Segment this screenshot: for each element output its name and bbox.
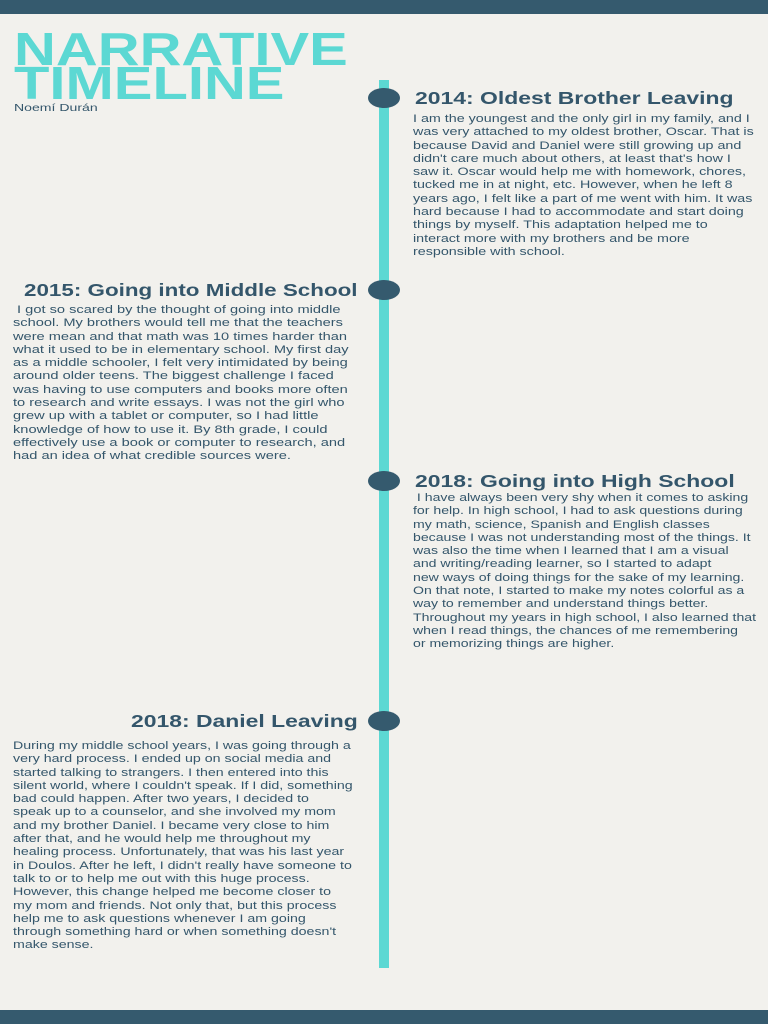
text 2018 Daniel: speak up to a counselor, and she involved my mom	[13, 806, 336, 818]
text 2018 Daniel: talk to or to help me out with this huge process.	[13, 873, 310, 885]
text 2018 Daniel: through something hard or when something doesn't	[13, 926, 336, 938]
text 2018 Daniel: very hard process. I ended up on social media and	[13, 753, 331, 765]
text 2015: effectively use a book or computer to research, and	[13, 437, 345, 449]
text 2014: because David and Daniel were still growing up and	[413, 140, 741, 152]
text 2018 high school: because I was not understanding most of the things. It	[413, 532, 751, 544]
text 2014: was very attached to my oldest brother, Oscar. That is	[413, 126, 754, 138]
text 2014: years ago, I felt like a part of me went with him. It was	[413, 193, 752, 205]
text 2015: I got so scared by the thought of going into middle	[17, 304, 341, 316]
text 2015: school. My brothers would tell me that the teachers	[13, 317, 343, 329]
text 2018 Daniel: silent world, where I couldn't speak. If I did, something	[13, 780, 353, 792]
text 2015: grew up with a tablet or computer, so I had little	[13, 410, 319, 422]
text 2018 Daniel: During my middle school years, I was going through a	[13, 740, 351, 752]
marker 2018 high school	[368, 471, 400, 491]
heading 2015: 2015: Going into Middle School	[24, 280, 358, 300]
text 2018 high school: On that note, I started to make my notes colorful as a	[413, 585, 744, 597]
text 2018 high school: way to remember and understand things better.	[413, 598, 708, 610]
text 2018 Daniel: bad could happen. After two years, I decided to	[13, 793, 309, 805]
top bar	[0, 0, 768, 14]
text 2018 high school: new ways of doing things for the sake of my learning.	[413, 572, 744, 584]
marker 2018 Daniel	[368, 711, 400, 731]
text 2015: knowledge of how to use it. By 8th grade, I could	[13, 424, 328, 436]
text 2015: around older teens. The biggest challenge I faced	[13, 370, 334, 382]
text 2015: were mean and that math was 10 times harder than	[13, 331, 347, 343]
text 2014: interact more with my brothers and be more	[413, 233, 690, 245]
text 2018 high school: I have always been very shy when it comes to asking	[417, 492, 748, 504]
text 2014: saw it. Oscar would help me with homework, chores,	[413, 166, 746, 178]
heading 2018 high school: 2018: Going into High School	[415, 471, 735, 491]
text 2018 Daniel: help me to ask questions whenever I am going	[13, 913, 306, 925]
text 2018 Daniel: healing process. Unfortunately, that was his last year	[13, 846, 344, 858]
title	[14, 23, 348, 109]
text 2014	[413, 113, 754, 258]
title: TIMELINE	[14, 57, 284, 109]
timeline line	[379, 80, 389, 968]
text 2014: responsible with school.	[413, 246, 565, 258]
text 2018 Daniel: after that, and he would help me throughout my	[13, 833, 311, 845]
author: Noemí Durán	[14, 102, 98, 114]
text 2015: was having to use computers and books more often	[13, 384, 348, 396]
text 2018 Daniel: However, this change helped me become closer to	[13, 886, 331, 898]
text 2018 high school: or memorizing things are higher.	[413, 638, 614, 650]
marker 2014	[368, 88, 400, 108]
text 2018 Daniel	[13, 740, 353, 951]
heading 2014: 2014: Oldest Brother Leaving	[415, 88, 734, 108]
text 2018 Daniel: and my brother Daniel. I became very close to him	[13, 820, 329, 832]
text 2014: tucked me in at night, etc. However, when he left 8	[413, 179, 733, 191]
text 2018 high school: Throughout my years in high school, I also learned that	[413, 612, 756, 624]
text 2018 Daniel: in Doulos. After he left, I didn't really have someone to	[13, 860, 352, 872]
heading 2018 Daniel: 2018: Daniel Leaving	[131, 711, 358, 731]
text 2015: had an idea of what credible sources were.	[13, 450, 291, 462]
text 2018 high school	[413, 492, 756, 650]
text 2018 high school: for help. In high school, I had to ask questions during	[413, 505, 743, 517]
text 2015: as a middle schooler, I felt very intimidated by being	[13, 357, 348, 369]
marker 2015	[368, 280, 400, 300]
text 2018 high school: and writing/reading learner, so I started to adapt	[413, 558, 711, 570]
text 2015: what it used to be in elementary school. My first day	[13, 344, 349, 356]
text 2018 Daniel: my mom and friends. Not only that, but this process	[13, 900, 336, 912]
text 2018 high school: was also the time when I learned that I am a visual	[413, 545, 729, 557]
text 2018 Daniel: make sense.	[13, 939, 93, 951]
bottom bar	[0, 1010, 768, 1024]
text 2014: didn't care much about others, at least that's how I	[413, 153, 731, 165]
title: NARRATIVE	[14, 23, 348, 75]
text 2018 Daniel: started talking to strangers. I then entered into this	[13, 767, 329, 779]
text 2015	[13, 304, 349, 462]
text 2014: hard because I had to accommodate and start doing	[413, 206, 744, 218]
text 2018 high school: my math, science, Spanish and English classes	[413, 519, 710, 531]
text 2014: I am the youngest and the only girl in my family, and I	[413, 113, 750, 125]
text 2018 high school: when I read things, the chances of me remembering	[413, 625, 738, 637]
text 2015: to research and write essays. I was not the girl who	[13, 397, 345, 409]
text 2014: things by myself. This adaptation helped me to	[413, 219, 708, 231]
